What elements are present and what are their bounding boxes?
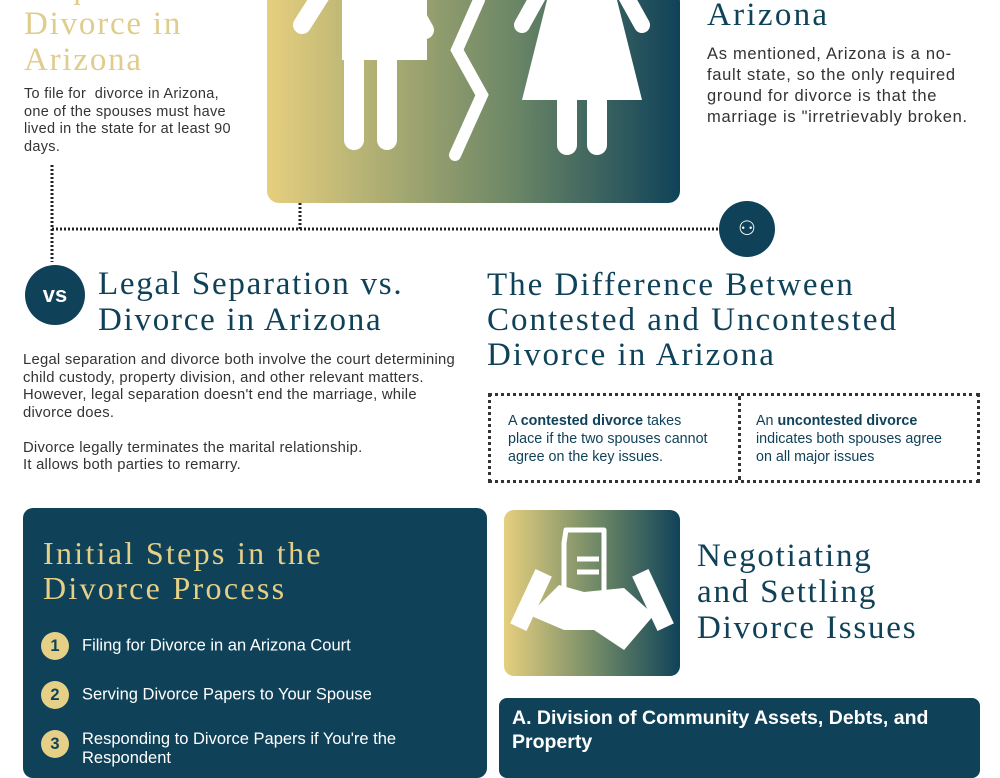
heading: contested vs uncontested: Divorce in Arizona: [487, 337, 776, 373]
icon: vs circle: vs: [43, 282, 67, 307]
step 3: [41, 730, 396, 767]
text: no-fault: fault state, so the only required: [707, 66, 956, 84]
heading: legal separation: Divorce in Arizona: [98, 302, 382, 338]
text: residency requirement: [24, 86, 231, 154]
heading: negotiating: [697, 538, 917, 646]
step 3: Respondent: [82, 749, 171, 767]
step 2: 2: [50, 686, 60, 704]
text: uncontested: indicates both spouses agree: [756, 431, 942, 447]
text: contested: A contested divorce takes: [508, 413, 681, 429]
step 2: Serving Divorce Papers to Your Spouse: [82, 685, 372, 703]
text: no-fault: ground for divorce is that the: [707, 87, 937, 105]
title: top-left heading: Divorce in: [24, 6, 182, 42]
text: uncontested: An uncontested divorce: [756, 413, 917, 429]
icon: family circle: [719, 201, 775, 257]
bar: division of assets: A. Division of Community Assets, Debts, and Property: [512, 707, 928, 753]
heading: negotiating: Divorce Issues: [697, 610, 917, 646]
step 1: [41, 632, 351, 660]
panel: initial steps: [23, 508, 487, 778]
text: contested: place if the two spouses cannot: [508, 431, 708, 447]
step 3: 3: [50, 735, 60, 753]
text: legal separation: It allows both parties to remarry.: [23, 457, 241, 473]
heading: legal separation: [98, 266, 403, 338]
heading: initial steps: [43, 535, 323, 606]
step 1: Filing for Divorce in an Arizona Court: [82, 636, 351, 654]
text: no-fault: [707, 45, 968, 126]
bar: division of assets: [499, 698, 980, 778]
text: residency requirement: lived in the state for at least 90: [24, 121, 231, 137]
text: legal separation: divorce does.: [23, 404, 114, 420]
title: top-left heading: Arizona: [24, 42, 143, 78]
text: contested: agree on the key issues.: [508, 449, 663, 465]
text: residency requirement: days.: [24, 138, 60, 154]
heading: initial steps: Initial Steps in the: [43, 535, 323, 571]
image: gradient box with couple split: [267, 0, 680, 203]
step 2: [41, 681, 372, 709]
heading: contested vs uncontested: [487, 267, 898, 373]
title: top-left heading: [24, 0, 283, 78]
text: legal separation: Legal separation and divorce both involve the court determining: [23, 352, 455, 368]
step 3: Responding to Divorce Papers if You're the: [82, 730, 396, 748]
text: legal separation: Divorce legally terminates the marital relationship.: [23, 440, 362, 456]
panel: contested/uncontested box: [488, 393, 980, 483]
text: legal separation: However, legal separation doesn't end the marriage, while: [23, 387, 417, 403]
heading: negotiating: Negotiating: [697, 538, 873, 574]
text: residency requirement: To file for divorce in Arizona,: [24, 86, 219, 102]
text: residency requirement: one of the spouses must have: [24, 104, 226, 120]
text: legal separation: [23, 352, 455, 473]
icon: family circle: ⚇: [738, 218, 756, 240]
icon: handshake gradient box: [504, 510, 680, 676]
text: uncontested: on all major issues: [756, 449, 874, 465]
step 1: 1: [50, 637, 60, 655]
heading: contested vs uncontested: Contested and Uncontested: [487, 302, 898, 338]
text: contested: [508, 413, 708, 465]
text: no-fault: marriage is "irretrievably broken.: [707, 108, 968, 126]
heading: negotiating: and Settling: [697, 574, 877, 610]
icon: vs circle: [25, 265, 85, 325]
connector lines: [50, 165, 718, 262]
text: legal separation: child custody, property division, and other relevant matters.: [23, 370, 424, 386]
text: no-fault: As mentioned, Arizona is a no-: [707, 45, 952, 63]
text: uncontested: [738, 396, 971, 480]
heading: legal separation: Legal Separation vs.: [98, 266, 403, 302]
heading: contested vs uncontested: The Difference Between: [487, 267, 855, 303]
heading: initial steps: Divorce Process: [43, 570, 286, 606]
